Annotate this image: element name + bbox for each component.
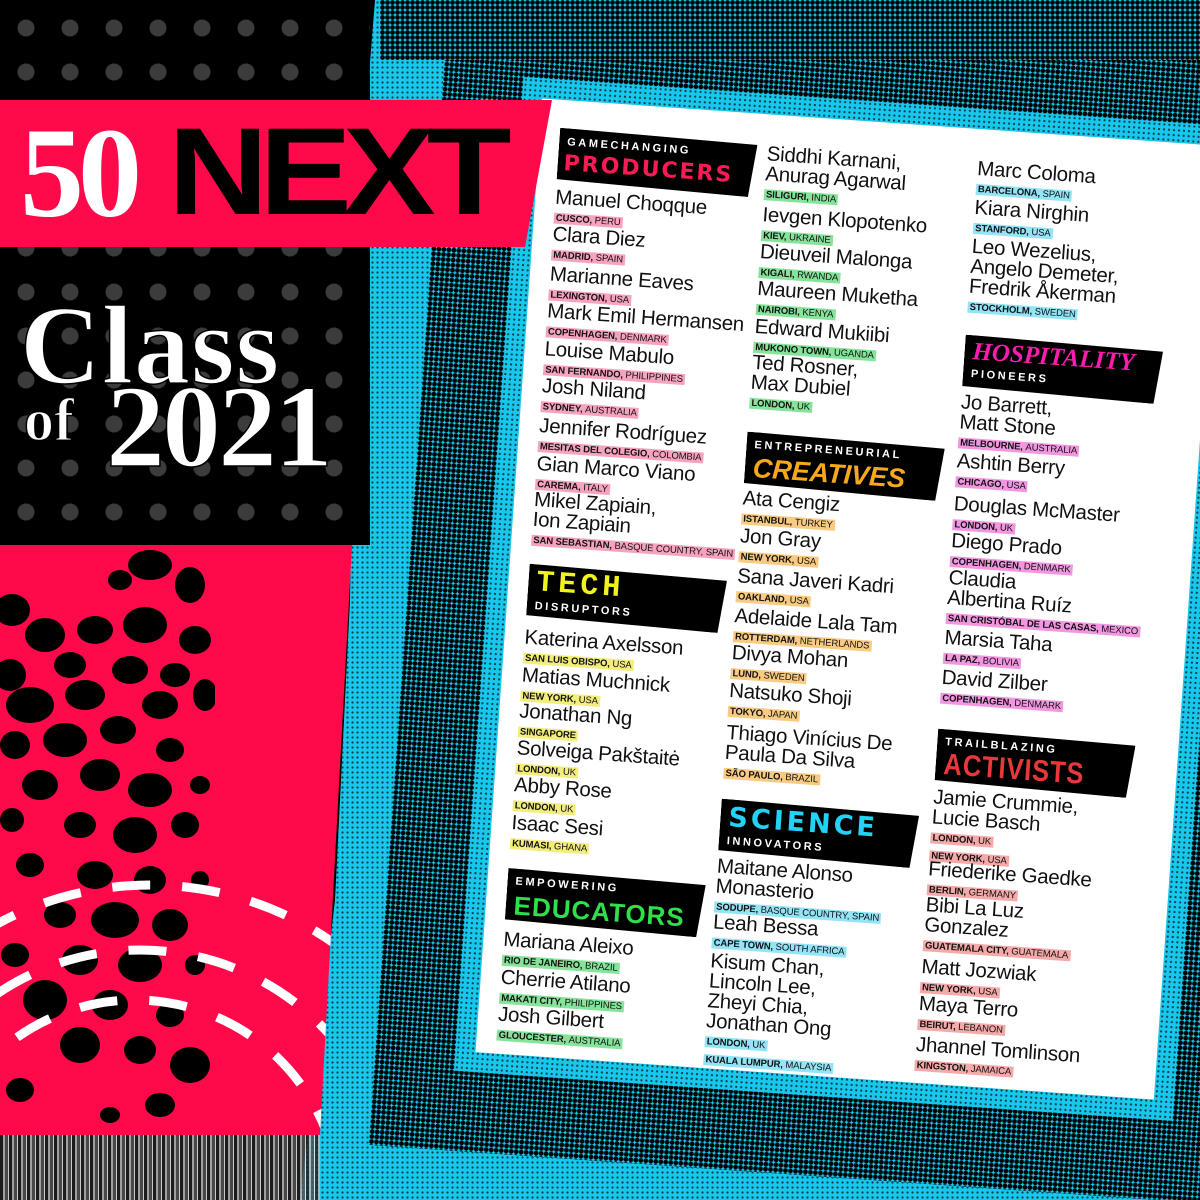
panel: names list: Adelaide Lala Tam [734,604,898,638]
header: hospitality pioneers [962,335,1163,404]
column 2 entries: Anurag Agarwal [765,162,906,195]
panel: names list: SÃO PAULO, BRAZIL [725,768,818,785]
header: trailblazing activists: ACTIVISTS [943,748,1085,791]
panel: names list: LONDON, UK [517,763,576,778]
panel: names list: NEW YORK, USA [522,691,598,707]
panel: names list: BERLIN, GERMANY [929,884,1016,901]
column 3 entries: Marc Coloma [977,157,1096,188]
panel: names list: Edward Mukiibi [754,315,890,347]
panel: names list: Louise Mabulo [544,337,675,369]
panel: names list: Maya Terro [918,992,1019,1022]
blue halftone background area [300,0,1200,1200]
panel: names list: David Zilber [941,666,1048,696]
panel: names list: Gian Marco Viano [536,452,696,486]
panel: names list: LONDON, UK [954,519,1013,534]
header: empowering educators: EMPOWERING [515,876,619,895]
dashed arcs [0,880,331,1129]
panel: names list: Katerina Axelsson [524,626,684,660]
title: Class of 2021: 2021 [106,361,330,492]
panel: names list: ROTTERDAM, NETHERLANDS [735,631,870,652]
panel: names list: COPENHAGEN, DENMARK [942,693,1061,712]
panel: names list: GUATEMALA CITY, GUATEMALA [925,940,1069,961]
panel: names list: LONDON, UK [932,832,991,848]
header: hospitality pioneers: PIONEERS [971,368,1049,385]
dotted black area top-left [0,0,370,545]
panel: names list: ISTANBUL, TURKEY [743,514,833,531]
logo 50: 50 [20,102,136,244]
panel: names list: Maureen Muketha [757,277,919,311]
panel: names list: Josh Niland [541,374,647,404]
panel: names list: LUND, SWEDEN [732,668,805,684]
panel: names list: Douglas McMaster [953,492,1120,527]
panel: names list: MESITAS DEL COLEGIO, COLOMBIA [539,441,702,463]
panel: names list: Manuel Choqque [555,186,708,219]
header: tech disruptors: TECH [535,566,625,606]
panel: names list: STOCKHOLM, SWEDEN [969,302,1076,320]
panel: names list: Mikel Zapiain, [533,488,657,519]
panel: names list: KINGSTON, JAMAICA [916,1060,1012,1078]
panel: names list: GLOUCESTER, AUSTRALIA [498,1030,621,1049]
panel: names list: MUKONO TOWN, UGANDA [755,342,874,361]
panel: names list: Marsia Taha [944,626,1053,656]
panel: names list: Bibi La Luz [925,893,1025,923]
panel: names list: Jennifer Rodríguez [539,414,708,449]
header: gamechanging producers [556,128,758,197]
panel: names list: Ion Zapiain [532,508,631,538]
panel: names list: Kisum Chan, [710,949,825,980]
header: science innovators: INNOVATORS [726,835,825,854]
panel: names list: SAN CRISTÓBAL DE LAS CASAS, MEXICO [947,613,1138,637]
header: science innovators [718,799,919,868]
panel: names list: Isaac Sesi [511,811,604,840]
panel: names list: STANFORD, USA [975,223,1051,239]
panel: names list: COPENHAGEN, DENMARK [548,326,667,346]
panel: names list: NEW YORK, USA [922,982,998,998]
panel: names list: Marianne Eaves [549,262,694,295]
panel: names list: Friederike Gaedke [928,857,1092,892]
banner: 50 NEXT logo [0,100,552,247]
panel: names list: Kiara Nirghin [974,196,1090,227]
panel: names list: Ted Rosner, [751,351,859,381]
panel: names list: Jo Barrett, [960,390,1053,420]
panel: names list: Zheyi Chia, [707,989,809,1019]
panel: names list: Gonzalez [924,913,1009,942]
panel: names list: Leah Bessa [712,910,819,941]
panel: names list: MAKATI CITY, PHILIPPINES [501,993,622,1012]
panel: names list: Angelo Demeter, [970,255,1119,288]
panel: names list: Jonathan Ong [705,1009,832,1041]
header: empowering educators [505,868,706,938]
pink block with cheetah spots [0,545,360,1135]
header: science innovators: SCIENCE [727,802,879,844]
panel: names list: Jonathan Ng [519,699,633,730]
panel: names list: Diego Prado [951,529,1063,560]
panel: names list: Paula Da Silva [724,741,856,773]
panel: names list: Abby Rose [513,773,612,803]
panel: names list: Lucie Basch [931,805,1041,836]
panel: names list: Matt Jozwiak [921,955,1037,986]
header: empowering educators: EDUCATORS [513,890,686,932]
panel: names list: Divya Mohan [731,641,849,672]
title: Class of 2021: Class [20,284,280,408]
panel: names list: Jamie Crummie, [933,785,1079,819]
panel: names list: COPENHAGEN, DENMARK [951,556,1071,575]
panel: names list: RIO DE JANEIRO, BRAZIL [504,955,618,974]
panel: names list: Max Dubiel [750,371,851,401]
panel: names list: Fredrik Åkerman [968,275,1117,308]
panel: names list: Ata Cengiz [742,486,841,516]
panel: names list: Jon Gray [739,524,822,553]
title: Class of 2021 [20,284,330,492]
panel: names list: Lincoln Lee, [708,969,817,1000]
panel: names list: Mariana Aleixo [503,928,634,960]
header: entrepreneurial creatives: ENTREPRENEURIAL [754,439,902,461]
panel: names list: CHICAGO, USA [957,476,1026,492]
panel: names list: Matias Muchnick [521,663,671,697]
panel: names list: BEIRUT, LEBANON [919,1019,1003,1036]
panel: names list: OAKLAND, USA [738,591,809,607]
header: trailblazing activists: TRAILBLAZING [945,736,1058,756]
panel: names list: Maitane Alonso [716,855,854,887]
header: tech disruptors [526,564,727,633]
panel: names list: KUALA LUMPUR, MALAYSIA [705,1054,832,1074]
header: hospitality pioneers: HOSPITALITY [972,338,1136,376]
panel: names list: SYDNEY, AUSTRALIA [542,401,637,419]
panel: names list: MELBOURNE, AUSTRALIA [960,437,1078,457]
header: trailblazing activists [934,729,1136,798]
panel: names list: CUSCO, PERU [555,213,621,228]
panel: names list [475,98,1200,1100]
panel: names list: TOKYO, JAPAN [729,706,798,722]
column 2 entries: Siddhi Karnani, [766,142,902,175]
column 2 entries [764,142,906,206]
panel: names list: Josh Gilbert [497,1003,605,1033]
panel: names list: Claudia [948,566,1017,594]
panel: names list: Sana Javeri Kadri [737,564,894,598]
panel: names list: LONDON, UK [706,1036,766,1051]
column 3 entries [976,157,1096,202]
panel: names list: SAN FERNANDO, PHILIPPINES [545,364,683,385]
panel: names list: SINGAPORE [520,726,576,741]
panel: names list: KIGALI, RWANDA [760,267,839,284]
cheetah spots [0,550,215,1123]
header: entrepreneurial creatives: CREATIVES [752,453,906,494]
header: gamechanging producers: GAMECHANGING [567,136,691,157]
header: gamechanging producers: PRODUCERS [563,151,734,188]
panel: names list: LEXINGTON, USA [550,290,629,306]
panel: names list: LONDON, UK [514,800,574,815]
panel: names list: LA PAZ, BOLIVIA [945,653,1019,669]
header: tech disruptors: DISRUPTORS [534,600,633,619]
panel: names list: NEW YORK, USA [931,850,1007,867]
logo NEXT: NEXT [168,103,503,241]
panel: names list: Thiago Vinícius De [726,721,893,755]
panel: names list: Ashtin Berry [956,449,1066,480]
panel: names list: Mark Emil Hermansen [547,299,745,336]
panel: names list: CAPE TOWN, SOUTH AFRICA [713,937,845,958]
panel: names list: SODUPE, BASQUE COUNTRY, SPAIN [716,902,880,924]
panel: names list: CAREMA, ITALY [537,479,608,495]
panel: names list: SAN SEBASTIAN, BASQUE COUNTRY, SPAIN [533,535,733,560]
panel: names list: Ievgen Klopotenko [762,203,928,238]
panel: names list: MADRID, SPAIN [553,250,623,265]
noise strip bottom [0,1135,320,1200]
column 3 entries: BARCELONA, SPAIN [977,184,1070,201]
panel: names list: NAIROBI, KENYA [758,304,834,320]
panel: names list: Natsuko Shoji [729,679,852,710]
panel: names list: Jhannel Tomlinson [915,1033,1081,1067]
column 2 entries: SILIGURI, INDIA [766,189,837,205]
panel: names list: Dieuveil Malonga [759,240,913,274]
header: entrepreneurial creatives [744,432,945,501]
halftone frame [369,0,1200,1200]
panel: names list: Albertina Ruíz [947,586,1072,618]
panel: names list: KUMASI, GHANA [512,838,588,854]
title: Class of 2021: of [24,387,74,453]
panel: names list: Cherrie Atilano [500,966,631,998]
panel: names list: NEW YORK, USA [740,551,816,568]
panel: names list: Monasterio [715,874,815,904]
panel: names list: Clara Diez [552,223,646,252]
panel: names list: Solveiga Pakštaitė [516,736,680,771]
panel: names list: KIEV, UKRAINE [763,230,831,246]
panel: names list: SAN LUIS OBISPO, USA [525,653,632,671]
panel: names list: LONDON, UK [751,398,810,413]
panel: names list: Matt Stone [959,410,1056,440]
panel: names list: Leo Wezelius, [971,235,1097,266]
